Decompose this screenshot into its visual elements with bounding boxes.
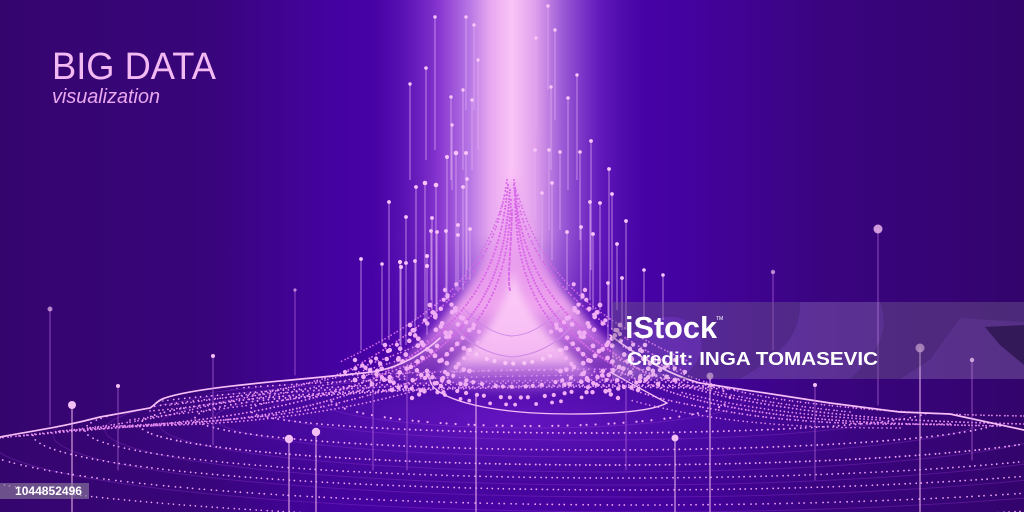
trademark: TM: [716, 316, 723, 322]
inner lobe: [440, 270, 594, 394]
cone of particles: [340, 180, 690, 378]
dotted ground rings: [0, 369, 1024, 512]
image id badge: 1044852496: [15, 486, 82, 498]
ridge and loop lines: [0, 310, 1024, 437]
cone body: [385, 180, 645, 392]
title: [52, 46, 217, 108]
large scattered particles: [345, 282, 685, 405]
ridge dotted band right: [600, 345, 1024, 428]
iStock logo: iStock: [625, 310, 718, 345]
data pins: around the beam: [359, 4, 665, 350]
watermark shadow shapes: [612, 302, 800, 379]
light beam: [386, 0, 626, 348]
credit line: Credit: INGA TOMASEVIC: [627, 348, 878, 369]
title: BIG DATA: [52, 46, 217, 88]
image id badge: [0, 483, 89, 499]
thin concentric ground rings: [0, 368, 1024, 512]
ridge dotted band left: [0, 340, 430, 438]
subtitle: visualization: [52, 86, 160, 108]
ground glow: [182, 343, 822, 508]
data pins: far field: [48, 224, 974, 512]
watermark panel: [612, 302, 1024, 379]
